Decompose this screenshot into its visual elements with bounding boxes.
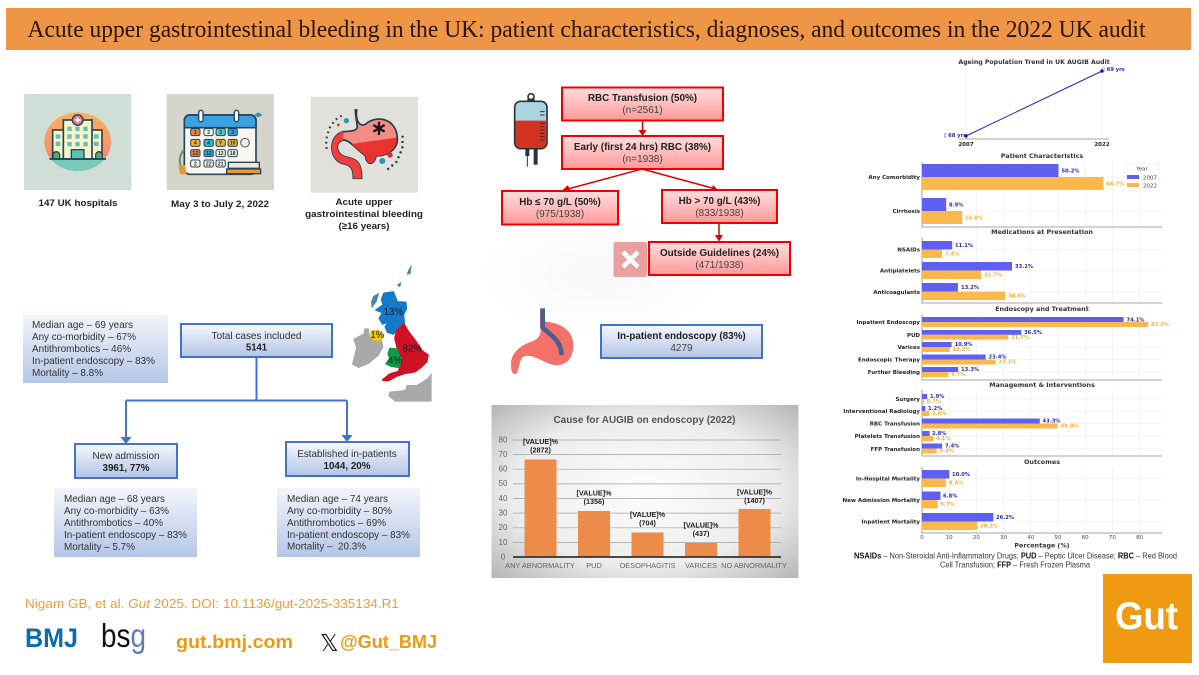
- chart: medications at presentation: 21.7%: [984, 272, 1003, 278]
- flow box: Hb at or below 70: (975/1938): [536, 209, 584, 220]
- chart: outcomes: Inpatient Mortality: [861, 520, 920, 526]
- flow box: Hb at or below 70: Hb ≤ 70 g/L (50%): [519, 197, 601, 208]
- legend: [1125, 164, 1159, 191]
- chart: endoscopy and treatment: 31.7%: [1011, 335, 1030, 341]
- flow box: RBC transfusion: RBC Transfusion (50%): [588, 93, 697, 104]
- flow box: Hb above 70: [662, 190, 777, 223]
- chart: outcomes: [843, 458, 1162, 550]
- arrows: early to Hb groups: [562, 169, 718, 192]
- text block: established in-patient statistics: Mortality – 20.3%: [287, 542, 366, 552]
- icon: calendar: 12: [218, 151, 224, 157]
- heading: Patient Characteristics: [1001, 152, 1083, 160]
- caption: hospitals: 147 UK hospitals: [38, 198, 118, 209]
- logo: BMJ: BMJ: [25, 623, 78, 653]
- chart: endoscopy and treatment: [856, 305, 1170, 380]
- bar: no abnormality: NO ABNORMALITY: [721, 561, 787, 570]
- icon: calendar: 3: [219, 130, 222, 136]
- flow box: established in-patients: Established in-patients: [297, 449, 397, 460]
- chart: outcomes: 6.8%: [943, 494, 958, 500]
- chart: outcomes: New Admission Mortality: [843, 498, 920, 504]
- text block: new admission statistics: Mortality – 5.7%: [64, 542, 135, 553]
- flow box: in-patient endoscopy: In-patient endoscopy (83%): [617, 331, 746, 342]
- x axis labels: Percentage (%): [1014, 542, 1070, 550]
- caption: dates: May 3 to July 2, 2022: [171, 199, 269, 210]
- flow box: outside guidelines: Outside Guidelines (24%): [660, 248, 779, 259]
- chart: management and interventions: 5.4%: [940, 448, 955, 454]
- caption: condition: Acute upper: [336, 197, 393, 208]
- icon: calendar: 4: [207, 141, 210, 147]
- x axis labels: 30: [1000, 535, 1008, 541]
- flow box: in-patient endoscopy: [601, 325, 762, 358]
- icon: calendar: 4: [194, 141, 197, 147]
- social handle: @Gut_BMJ: [340, 632, 437, 652]
- flow box: early RBC: [562, 136, 723, 169]
- footnote: abbreviations: NSAIDs – Non-Steroidal Anti-Inflammatory Drugs; PUD – Peptic Ulcer Disease; RBC – Red Blood: [854, 550, 1177, 560]
- map: UK nations: 13%: [384, 307, 403, 318]
- chart: medications at presentation: 33.1%: [1015, 264, 1034, 270]
- legend: 2022: [1143, 184, 1157, 190]
- footnote: abbreviations: [854, 550, 1177, 570]
- logo: Gut journal: Gut: [1115, 595, 1178, 638]
- bar: oesophagitis: OESOPHAGITIS: [620, 561, 675, 570]
- caption: condition: [305, 197, 423, 232]
- bar: oesophagitis: [VALUE]%: [630, 510, 666, 519]
- bar: any abnormality: [505, 437, 575, 570]
- panel: cause for AUGIB bar chart: 80: [499, 436, 508, 444]
- footnote: abbreviations: Cell Transfusion; FFP – Fresh Frozen Plasma: [940, 560, 1090, 570]
- text block: established in-patient statistics: Median age – 74 years: [287, 494, 388, 505]
- panel: cause for AUGIB bar chart: 50: [499, 479, 508, 488]
- chart: patient characteristics: 66.7%: [1106, 182, 1125, 188]
- panel: cause for AUGIB bar chart: [492, 405, 798, 578]
- heading: Management & Interventions: [989, 381, 1095, 389]
- bar: PUD: (1356): [584, 497, 605, 506]
- x axis labels: 60: [1082, 535, 1089, 541]
- chart: management and interventions: Surgery: [895, 397, 920, 403]
- map: UK nations: [353, 265, 432, 402]
- map: UK nations: 1%: [370, 330, 385, 341]
- chart: medications at presentation: 13.2%: [961, 285, 980, 291]
- text block: overall statistics: Antithrombotics – 46%: [32, 344, 131, 355]
- flow box: total cases: [181, 324, 332, 357]
- chart: management and interventions: FFP Transfusion: [871, 447, 920, 453]
- link: website: gut.bmj.com: [176, 631, 293, 652]
- panel: cause for AUGIB bar chart: 10: [499, 538, 508, 547]
- line chart: ageing population trend: [944, 59, 1125, 148]
- icon: calendar: 22: [206, 161, 212, 167]
- chart: endoscopy and treatment: Endoscopic Therapy: [858, 358, 920, 364]
- bar: varices: [683, 520, 719, 570]
- bar: varices: (437): [693, 529, 710, 538]
- chart: outcomes: 26.2%: [996, 515, 1015, 521]
- chart: patient characteristics: Cirrhosis: [893, 209, 921, 215]
- heading: Outcomes: [1024, 458, 1060, 466]
- chart: endoscopy and treatment: PUD: [907, 333, 920, 339]
- social handle: [320, 631, 437, 657]
- panel: hospitals count: [24, 94, 131, 209]
- panel: cause for AUGIB bar chart: 60: [499, 464, 508, 474]
- bar: no abnormality: (1407): [744, 496, 765, 505]
- arrow: Hb above 70 to outside guidelines: [715, 223, 723, 242]
- chart: management and interventions: Interventional Radiology: [843, 409, 920, 415]
- chart: medications at presentation: Anticoagulants: [873, 290, 921, 296]
- text block: overall statistics: Median age – 69 years: [32, 320, 133, 331]
- icon: calendar: 1: [194, 130, 197, 136]
- chart: management and interventions: 4.1%: [936, 436, 951, 442]
- flow box: total cases: Total cases included: [212, 331, 302, 342]
- icon: hospital: [24, 94, 131, 190]
- flow box: outside guidelines: (471/1938): [695, 260, 744, 271]
- x axis labels: 0: [920, 535, 924, 541]
- text block: established in-patient statistics: Any co-morbidity – 80%: [287, 506, 392, 517]
- chart: endoscopy and treatment: Inpatient Endoscopy: [856, 320, 920, 326]
- bar: varices: [VALUE]%: [683, 520, 719, 530]
- icon: calendar: Y: [219, 141, 223, 147]
- text block: new admission statistics: [54, 488, 197, 557]
- icon: calendar: 2: [207, 130, 210, 136]
- caption: condition: (≥16 years): [338, 221, 390, 232]
- chart: outcomes: 10.0%: [952, 472, 971, 478]
- chart: endoscopy and treatment: 74.1%: [1126, 318, 1145, 324]
- bar: PUD: [576, 488, 612, 570]
- title banner: Acute upper gastrointestinal bleeding in the UK: patient characteristics, diagnoses, and outcomes in the 2022 UK audit: [28, 17, 1146, 43]
- chart: patient characteristics: Any Comorbidity: [868, 175, 920, 181]
- legend: Year: [1135, 166, 1149, 172]
- text block: new admission statistics: Antithrombotics – 40%: [64, 518, 163, 529]
- text block: overall statistics: Mortality – 8.8%: [32, 368, 103, 379]
- chart: management and interventions: 2.6%: [932, 411, 947, 417]
- x axis labels: 10: [946, 535, 953, 541]
- bar: no abnormality: [721, 488, 787, 570]
- flow box: Hb at or below 70: [502, 191, 618, 224]
- flow box: early RBC: Early (first 24 hrs) RBC (38%): [574, 142, 711, 153]
- heading: Endoscopy and Treatment: [995, 305, 1089, 313]
- flow box: RBC transfusion: [562, 88, 723, 120]
- line chart: ageing population trend: 2007: [958, 142, 974, 148]
- flow box: new admission: 3961, 77%: [102, 463, 150, 474]
- bar: any abnormality: ANY ABNORMALITY: [505, 561, 575, 570]
- chart: endoscopy and treatment: 13.3%: [961, 367, 980, 373]
- bar: PUD: [VALUE]%: [576, 488, 612, 498]
- arrow: RBC to early: [638, 121, 646, 136]
- bar: any abnormality: (2872): [530, 446, 551, 454]
- chart: medications at presentation: Antiplatelets: [880, 268, 921, 274]
- chart: management and interventions: 2.8%: [932, 431, 947, 437]
- logo: bsg: bsg: [101, 617, 146, 654]
- text block: established in-patient statistics: [277, 488, 420, 557]
- flow box: in-patient endoscopy: 4279: [670, 343, 693, 354]
- chart: medications at presentation: 11.1%: [955, 243, 974, 249]
- panel: cause for AUGIB bar chart: 20: [499, 523, 508, 532]
- chart: medications at presentation: [873, 228, 1162, 303]
- flow box: RBC transfusion: (n=2561): [622, 105, 663, 116]
- icon: calendar: 3: [231, 130, 234, 136]
- chart: endoscopy and treatment: 10.2%: [952, 347, 971, 353]
- panel: study dates: [167, 94, 274, 210]
- panel: cause for AUGIB bar chart: 30: [499, 508, 508, 518]
- social handle: 𝕏: [320, 631, 339, 657]
- chart: medications at presentation: 7.4%: [945, 252, 960, 258]
- chart: endoscopy and treatment: 36.5%: [1024, 330, 1043, 336]
- flow box: total cases: 5141: [246, 342, 267, 354]
- chart: management and interventions: RBC Transfusion: [870, 422, 920, 428]
- icon: calendar: 12: [206, 151, 212, 157]
- chart: endoscopy and treatment: 27.1%: [998, 360, 1017, 366]
- line chart title: Ageing Population Trend in UK AUGIB Audit: [958, 59, 1110, 66]
- chart: endoscopy and treatment: 23.4%: [988, 354, 1007, 360]
- icon: calendar: 18: [230, 151, 236, 157]
- bar: varices: VARICES: [685, 561, 717, 570]
- panel: cause for AUGIB bar chart: 40: [499, 494, 508, 503]
- x axis labels: [920, 535, 1144, 550]
- line chart: ageing population trend: ▯ 69 yrs: [1102, 67, 1125, 73]
- text block: established in-patient statistics: In-patient endoscopy – 83%: [287, 530, 410, 541]
- text block: overall statistics: In-patient endoscopy – 83%: [32, 356, 155, 367]
- bar: oesophagitis: (704): [639, 518, 656, 528]
- icon: calendar: 21: [218, 161, 224, 167]
- bar: no abnormality: [VALUE]%: [737, 488, 773, 496]
- panel: cause for AUGIB bar chart: 70: [499, 450, 508, 459]
- icon: blood bag: [515, 94, 547, 167]
- heading: Medications at Presentation: [991, 228, 1093, 236]
- text block: new admission statistics: Any co-morbidity – 63%: [64, 506, 169, 517]
- line chart: ageing population trend: ▯ 68 yrs: [944, 133, 966, 139]
- bar: oesophagitis: [620, 510, 675, 570]
- legend: 2007: [1143, 176, 1157, 182]
- chart: outcomes: In-Hospital Mortality: [856, 476, 920, 482]
- map: UK nations: 4%: [388, 355, 402, 366]
- citation: Nigam GB, et al. Gut 2025. DOI: 10.1136/gut-2025-335134.R1: [25, 597, 399, 611]
- chart: management and interventions: [843, 381, 1162, 456]
- icon: stomach with endoscope: [511, 308, 573, 374]
- chart title: Cause for AUGIB on endoscopy (2022): [554, 414, 736, 426]
- chart: endoscopy and treatment: Further Bleeding: [868, 370, 920, 376]
- icon: calendar: [167, 94, 274, 190]
- x axis labels: 50: [1054, 535, 1062, 541]
- line chart: ageing population trend: 2022: [1094, 142, 1110, 148]
- flow box: Hb above 70: (833/1938): [695, 208, 744, 219]
- chart: endoscopy and treatment: 83.2%: [1151, 322, 1170, 328]
- chart: patient characteristics: 50.2%: [1062, 168, 1080, 174]
- icon: cross mark: [614, 242, 647, 277]
- chart: outcomes: 8.8%: [949, 480, 964, 486]
- chart: medications at presentation: NSAIDs: [897, 248, 921, 254]
- chart: management and interventions: 0.7%: [926, 399, 942, 405]
- text block: overall statistics: [23, 315, 168, 383]
- x axis labels: 70: [1109, 535, 1116, 541]
- chart: outcomes: 20.3%: [980, 524, 999, 530]
- icon: calendar: 12: [192, 151, 198, 157]
- icon: calendar: 10: [230, 141, 236, 147]
- chart: management and interventions: 49.8%: [1060, 424, 1079, 430]
- text block: established in-patient statistics: Antithrombotics – 69%: [287, 518, 386, 529]
- chart: endoscopy and treatment: 9.7%: [951, 372, 966, 378]
- chart: endoscopy and treatment: 10.9%: [954, 342, 973, 348]
- bar: PUD: PUD: [586, 561, 602, 570]
- text block: new admission statistics: In-patient endoscopy – 83%: [64, 530, 187, 541]
- chart: management and interventions: Platelets Transfusion: [855, 434, 920, 440]
- panel: cause for AUGIB bar chart: 0: [501, 552, 506, 562]
- chart: management and interventions: 7.4%: [945, 444, 960, 450]
- chart: patient characteristics: 14.8%: [965, 216, 984, 222]
- flow box: outside guidelines: [649, 242, 790, 275]
- chart: patient characteristics: 8.9%: [949, 202, 964, 208]
- map: UK nations: 82%: [403, 343, 422, 354]
- arrows: split to admission groups: [120, 357, 352, 444]
- logo: Gut journal: [1103, 574, 1192, 663]
- icon: calendar: 2: [194, 161, 197, 167]
- flow box: new admission: New admission: [92, 451, 160, 462]
- chart: management and interventions: 1.2%: [928, 406, 943, 412]
- chart: patient characteristics: [868, 152, 1162, 227]
- text block: new admission statistics: Median age – 68 years: [64, 494, 165, 505]
- x axis labels: 40: [1027, 535, 1035, 541]
- flow box: new admission: [75, 444, 177, 478]
- x axis labels: 20: [973, 535, 980, 541]
- flow box: established in-patients: [286, 442, 409, 476]
- chart: outcomes: 5.7%: [940, 502, 955, 508]
- x axis labels: 80: [1136, 535, 1144, 541]
- text block: overall statistics: Any co-morbidity – 67%: [32, 332, 136, 343]
- chart: endoscopy and treatment: Varices: [897, 345, 921, 351]
- title banner: [6, 8, 1191, 50]
- chart: management and interventions: 1.9%: [930, 394, 945, 400]
- flow box: early RBC: (n=1938): [622, 154, 663, 165]
- caption: condition: gastrointestinal bleeding: [305, 209, 423, 220]
- bar: any abnormality: [VALUE]%: [523, 437, 559, 446]
- icon: bleeding stomach: [311, 97, 418, 193]
- flow box: established in-patients: 1044, 20%: [324, 461, 370, 472]
- chart: medications at presentation: 30.6%: [1008, 294, 1027, 300]
- panel: condition: [305, 97, 423, 232]
- chart: management and interventions: 43.3%: [1042, 418, 1061, 424]
- flow box: Hb above 70: Hb > 70 g/L (43%): [679, 196, 760, 207]
